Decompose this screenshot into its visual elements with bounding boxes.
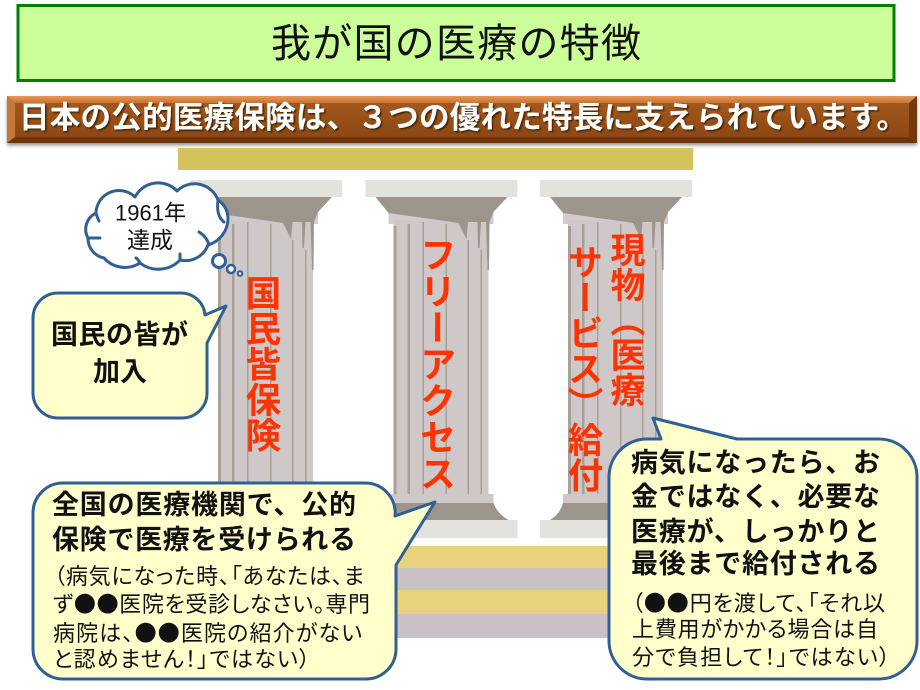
callout: benefits through to the end: 分で負担して！」ではない）	[632, 640, 890, 672]
callout: benefits through to the end: 病気になったら、お	[631, 448, 880, 478]
callout: benefits through to the end: （●●円を渡して、「それ以	[632, 586, 885, 618]
callout: everyone enrolled: 国民の皆が	[51, 319, 188, 350]
callout: benefits through to the end: 上費用がかかる場合は自	[632, 612, 878, 644]
callout: any medical institution: 病院は、●●医院の紹介がない	[53, 616, 362, 648]
pillar: benefits in kind: 現物（医療	[606, 232, 645, 407]
title box: 我が国の医療の特徴	[271, 22, 641, 66]
callout: benefits through to the end: 医療が、しっかりと	[631, 516, 880, 547]
callout: any medical institution: 保険で医療を受けられる	[52, 525, 356, 555]
thought cloud: 1961: 達成	[127, 227, 173, 253]
thought cloud: 1961	[86, 183, 242, 276]
pillar: benefits in kind: サービス）給付	[563, 244, 603, 492]
callout: any medical institution: と認めません！」ではない）	[53, 642, 310, 674]
pillar: free access: フリーアクセス	[414, 236, 456, 492]
pillar: universal coverage	[190, 180, 342, 538]
temple base steps	[178, 546, 693, 638]
callout: benefits through to the end: 最後まで給付される	[631, 549, 880, 579]
pillar: universal coverage: 国民皆保険	[241, 275, 281, 452]
temple roof beam	[178, 148, 693, 170]
callout: everyone enrolled	[33, 293, 226, 418]
callout: any medical institution: 全国の医療機関で、公的	[52, 490, 356, 520]
thought cloud: 1961: 1961年	[115, 200, 186, 226]
subtitle banner: 日本の公的医療保険は、３つの優れた特長に支えられています。	[19, 101, 907, 135]
pillar: free access	[366, 180, 518, 538]
callout: benefits through to the end	[609, 418, 917, 679]
callout: everyone enrolled: 加入	[93, 357, 147, 387]
callout: any medical institution	[33, 483, 435, 679]
callout: any medical institution: （病気になった時、「あなたは、ま	[54, 559, 364, 591]
callout: benefits through to the end: 金ではなく、必要な	[631, 482, 880, 512]
title box	[18, 6, 894, 80]
pillar: benefits in kind	[540, 180, 692, 538]
callout: any medical institution: ず●●医院を受診しなさい。専門	[53, 587, 370, 619]
